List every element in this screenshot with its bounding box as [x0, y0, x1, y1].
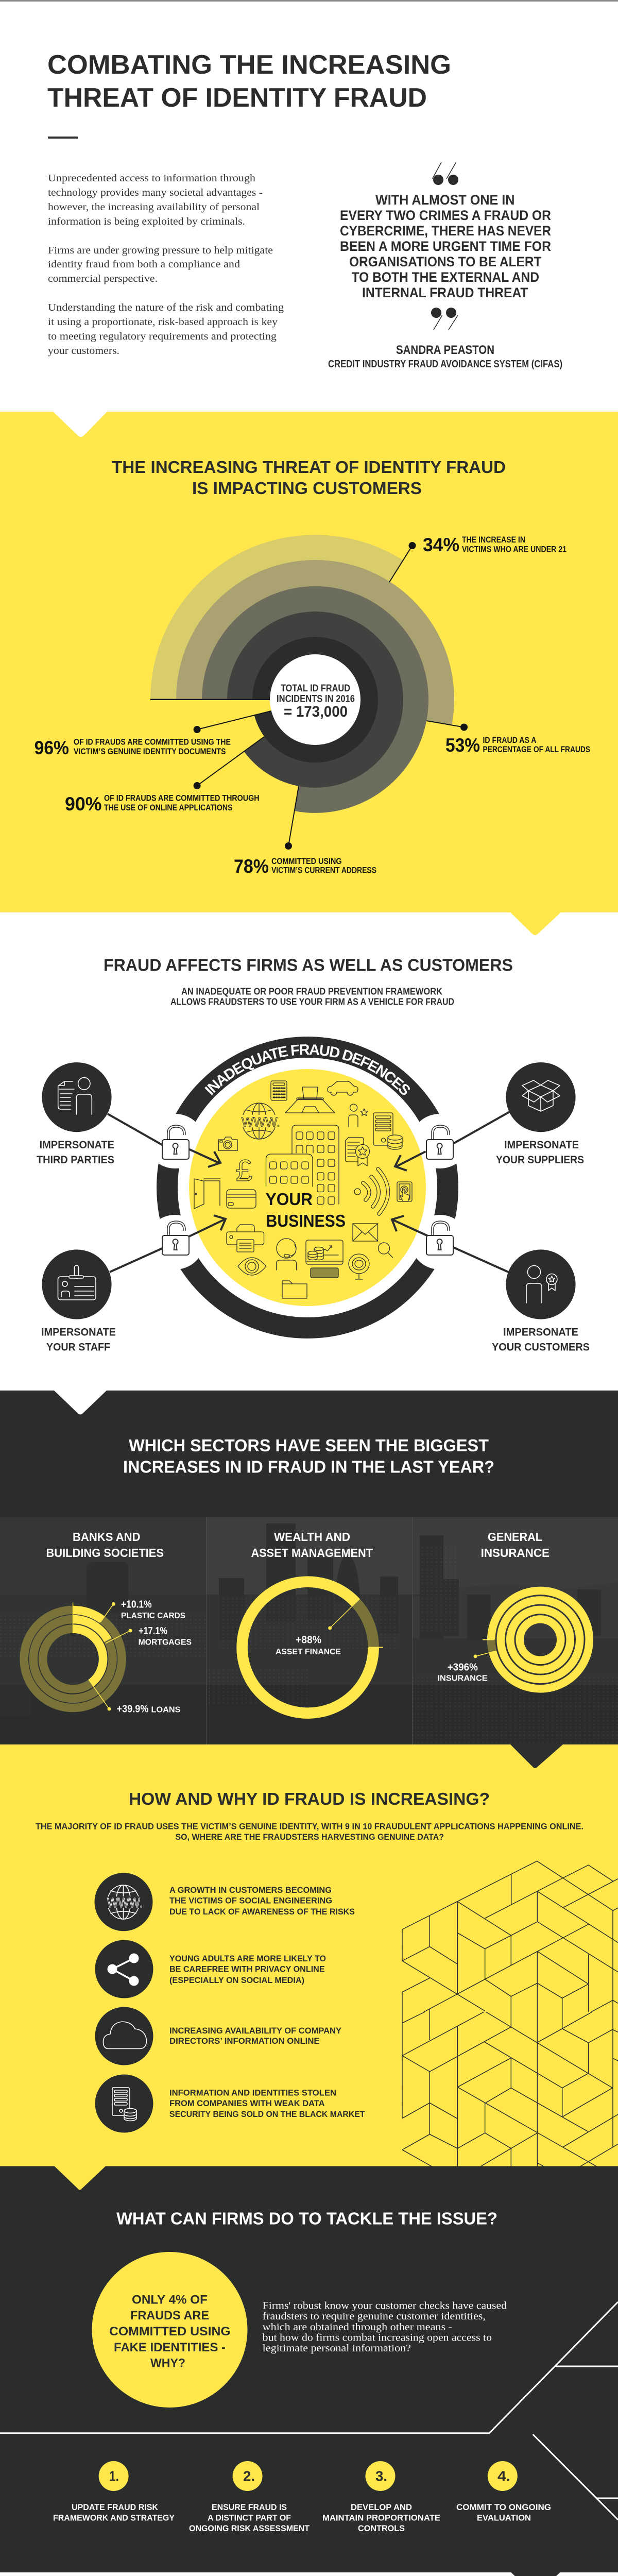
- intro text block: however, the increasing availability of personal: [48, 201, 260, 213]
- icon: closing quote mark: [431, 308, 458, 330]
- icon: padlock bottom right: [426, 1222, 453, 1255]
- panel: firms affected: [37, 912, 590, 1353]
- icon: document and person: [58, 1078, 92, 1114]
- callout: insurance: INSURANCE: [438, 1674, 488, 1683]
- icon: share: [107, 1954, 139, 1986]
- icon: server and database: [112, 2088, 136, 2121]
- icon: folder: [282, 1281, 307, 1298]
- label: [41, 1326, 116, 1353]
- item: young adults: [95, 1940, 326, 1998]
- intro text block: technology provides many societal advantages -: [48, 187, 263, 198]
- text: INCREASING AVAILABILITY OF COMPANY: [169, 2026, 342, 2036]
- callout: 90%: THE USE OF ONLINE APPLICATIONS: [104, 803, 233, 812]
- callout: asset finance: ASSET FINANCE: [276, 1648, 341, 1656]
- label: YOUR STAFF: [46, 1342, 110, 1353]
- heading: INCREASES IN ID FRAUD IN THE LAST YEAR?: [123, 1457, 494, 1477]
- subheading: AN INADEQUATE OR POOR FRAUD PREVENTION FRAMEWORK: [181, 987, 442, 997]
- pull quote: EVERY TWO CRIMES A FRAUD OR: [340, 208, 551, 223]
- callout: plastic cards: PLASTIC CARDS: [121, 1612, 185, 1620]
- callout: 96%: VICTIM’S GENUINE IDENTITY DOCUMENTS: [74, 747, 226, 756]
- attack path: suppliers: [395, 1062, 584, 1171]
- callout: mortgages: +17.1%: [139, 1625, 167, 1637]
- callout: loans: [89, 1680, 181, 1715]
- callout: loans: +39.9%: [116, 1704, 149, 1715]
- label: IMPERSONATE: [503, 1326, 578, 1338]
- step 3: [322, 2461, 440, 2533]
- text: THE VICTIMS OF SOCIAL ENGINEERING: [169, 1896, 332, 1906]
- step 1: 1.: [109, 2468, 119, 2484]
- subheading: ALLOWS FRAUDSTERS TO USE YOUR FIRM AS A VEHICLE FOR FRAUD: [170, 997, 454, 1007]
- notch arrow: [511, 2572, 560, 2576]
- step 2: 2.: [243, 2468, 255, 2484]
- item: black market: [95, 2074, 365, 2133]
- notch arrow: [54, 1391, 107, 1415]
- label: YOUR SUPPLIERS: [496, 1154, 584, 1166]
- step 4: COMMIT TO ONGOING: [456, 2502, 551, 2512]
- chart: banks rings: [24, 1603, 122, 1708]
- callout: 96%: 96%: [35, 737, 69, 758]
- centre total: INCIDENTS IN 2016: [277, 693, 355, 705]
- intro text block: identity fraud from both a compliance and: [48, 259, 240, 270]
- subheading: [170, 987, 454, 1007]
- skyline photo background: [0, 1517, 618, 1747]
- text: DUE TO LACK OF AWARENESS OF THE RISKS: [169, 1907, 355, 1917]
- icon: touch screen: [397, 1182, 412, 1201]
- callout: mortgages: MORTGAGES: [139, 1638, 192, 1647]
- panel: what firms can do: [0, 2166, 618, 2572]
- icon: camera: [218, 1137, 237, 1151]
- sector title: [46, 1530, 164, 1560]
- icon: globe: WWW.: [107, 1895, 143, 1910]
- heading: WHAT CAN FIRMS DO TO TACKLE THE ISSUE?: [116, 2209, 497, 2228]
- step 4: [456, 2461, 551, 2522]
- notch arrow: [53, 412, 107, 437]
- icon: car: [328, 1081, 358, 1095]
- callout: 34%: THE INCREASE IN: [462, 535, 525, 545]
- body text: legitimate personal information?: [263, 2343, 411, 2354]
- label: IMPERSONATE: [41, 1326, 116, 1338]
- body text: Firms' robust know your customer checks have caused: [263, 2300, 507, 2312]
- icon: eye: [238, 1258, 266, 1275]
- pull quote: [340, 192, 551, 300]
- callout circle: FRAUDS ARE: [130, 2309, 209, 2323]
- icon: desk lamp laptop: [285, 1087, 335, 1113]
- callout: mortgages: [106, 1625, 192, 1647]
- callout: 96%: OF ID FRAUDS ARE COMMITTED USING THE: [74, 738, 231, 747]
- icon: globe www: WWW.: [242, 1114, 280, 1130]
- business circle: [189, 1069, 426, 1306]
- icon: monitor with finance chart: [306, 1240, 343, 1278]
- icon: magnifier: [378, 1243, 392, 1258]
- heading: [123, 1436, 494, 1477]
- label: YOUR CUSTOMERS: [492, 1342, 590, 1353]
- ring label: INADEQUATE FRAUD DEFENCES: [204, 1044, 410, 1095]
- callout: asset finance: [276, 1599, 359, 1656]
- text: A GROWTH IN CUSTOMERS BECOMING: [169, 1885, 332, 1895]
- callout: 90%: 90%: [65, 793, 102, 815]
- sector title: INSURANCE: [481, 1546, 550, 1560]
- label: [37, 1139, 114, 1166]
- icon: printer: [227, 1225, 264, 1252]
- callout: 53%: 53%: [445, 735, 480, 756]
- text: [169, 2026, 342, 2046]
- intro text block: to meeting regulatory requirements and protecting: [48, 331, 277, 342]
- label: [492, 1326, 590, 1353]
- text: DIRECTORS’ INFORMATION ONLINE: [169, 2036, 320, 2046]
- step 3: 3.: [375, 2468, 387, 2484]
- icon: opening quote mark: [433, 162, 458, 185]
- step 3: CONTROLS: [358, 2523, 405, 2533]
- icon: globe www: [241, 1103, 281, 1139]
- notch arrow: [510, 912, 561, 935]
- heading: THE INCREASING THREAT OF IDENTITY FRAUD: [112, 457, 506, 477]
- step 2: ONGOING RISK ASSESSMENT: [189, 2523, 310, 2533]
- callout: asset finance: +88%: [296, 1635, 321, 1646]
- label: IMPERSONATE: [39, 1139, 114, 1151]
- title rule: [48, 137, 78, 139]
- callout circle: [92, 2252, 247, 2408]
- icon: padlock top right: [426, 1126, 453, 1159]
- callout: insurance: +396%: [448, 1662, 478, 1673]
- text: SECURITY BEING SOLD ON THE BLACK MARKET: [169, 2109, 365, 2119]
- panel: introduction: [47, 50, 562, 370]
- heading: IS IMPACTING CUSTOMERS: [192, 479, 422, 498]
- notch arrow: [510, 1744, 563, 1768]
- icon: customer with award: [526, 1265, 557, 1303]
- step 2: ENSURE FRAUD IS: [212, 2502, 287, 2512]
- icon: person with star: [349, 1104, 368, 1127]
- icon: credit card: [227, 1190, 256, 1208]
- icon: staff id badge: [58, 1265, 96, 1300]
- icon: webcam: [349, 1254, 369, 1279]
- heading: WHICH SECTORS HAVE SEEN THE BIGGEST: [129, 1436, 489, 1455]
- callout: 78%: VICTIM’S CURRENT ADDRESS: [271, 866, 376, 875]
- attack path: customers: [392, 1216, 590, 1353]
- panel: how and why: [0, 1744, 618, 2166]
- sector: wealth and asset management: [242, 1530, 383, 1713]
- icon: tall building: [292, 1125, 339, 1205]
- callout: plastic cards: [100, 1599, 185, 1622]
- subheading: [36, 1822, 583, 1842]
- text: [169, 2088, 365, 2119]
- callout circle: WHY?: [150, 2357, 185, 2370]
- callout circle: FAKE IDENTITIES -: [114, 2341, 226, 2354]
- centre total: [277, 683, 355, 720]
- text: INFORMATION AND IDENTITIES STOLEN: [169, 2088, 336, 2098]
- callout: 34%: 34%: [423, 534, 459, 555]
- text: (ESPECIALLY ON SOCIAL MEDIA): [169, 1975, 304, 1985]
- chart: radial fraud statistics: [150, 535, 454, 813]
- icon: server and database: [373, 1113, 402, 1149]
- callout: 53%: PERCENTAGE OF ALL FRAUDS: [483, 745, 590, 754]
- label: THIRD PARTIES: [37, 1154, 114, 1166]
- sector title: WEALTH AND: [274, 1530, 350, 1544]
- icon: padlock top left: [162, 1126, 189, 1159]
- step 1: [53, 2461, 175, 2522]
- step 1: FRAMEWORK AND STRATEGY: [53, 2513, 175, 2522]
- text: BE CAREFREE WITH PRIVACY ONLINE: [169, 1964, 325, 1974]
- business label: BUSINESS: [266, 1211, 346, 1230]
- text: [169, 1954, 326, 1985]
- sector title: BANKS AND: [73, 1530, 140, 1544]
- intro text block: Understanding the nature of the risk and combating: [48, 302, 284, 313]
- pull quote: CYBERCRIME, THERE HAS NEVER: [340, 223, 551, 239]
- callout: 96%: [35, 711, 271, 758]
- body text: [263, 2300, 507, 2354]
- intro text block: Unprecedented access to information through: [48, 173, 255, 184]
- sector title: [251, 1530, 373, 1560]
- callout: 34%: VICTIMS WHO ARE UNDER 21: [462, 545, 566, 554]
- sector title: ASSET MANAGEMENT: [251, 1546, 373, 1560]
- icon: front building: [266, 1154, 313, 1187]
- icon: pound sign: £: [236, 1154, 252, 1188]
- text: [169, 1885, 355, 1917]
- callout: 34%: [389, 534, 566, 582]
- business label: [266, 1190, 346, 1230]
- step 1: UPDATE FRAUD RISK: [72, 2502, 159, 2512]
- title: [47, 50, 451, 113]
- quote attribution: [328, 343, 562, 370]
- icon: wireless signal: [354, 1169, 388, 1214]
- icon: envelope: [353, 1224, 378, 1241]
- callout: 53%: ID FRAUD AS A: [483, 736, 537, 745]
- callout: 78%: COMMITTED USING: [271, 857, 342, 866]
- title: COMBATING THE INCREASING: [47, 50, 451, 80]
- callout: plastic cards: +10.1%: [121, 1599, 152, 1611]
- attack path: staff: [41, 1215, 226, 1353]
- sector title: BUILDING SOCIETIES: [46, 1546, 164, 1560]
- callout: 90%: OF ID FRAUDS ARE COMMITTED THROUGH: [104, 793, 260, 803]
- defences ring: [157, 1037, 458, 1338]
- body text: fraudsters to require genuine customer identities,: [263, 2311, 486, 2322]
- chart: wealth ring: [242, 1582, 383, 1713]
- intro text block: commercial perspective.: [48, 273, 158, 284]
- pull quote: WITH ALMOST ONE IN: [375, 192, 515, 208]
- callout: loans: LOANS: [151, 1706, 181, 1715]
- body text: but how do firms combat increasing open access to: [263, 2332, 492, 2343]
- subheading: SO, WHERE ARE THE FRAUDSTERS HARVESTING GENUINE DATA?: [175, 1832, 444, 1842]
- step 4: 4.: [497, 2468, 510, 2484]
- icon: door: [194, 1179, 220, 1209]
- icon: globe: [107, 1885, 144, 1919]
- intro text block: [48, 173, 284, 357]
- decorative white lines: [0, 2302, 618, 2520]
- callout: 78%: 78%: [234, 856, 269, 877]
- panel: sectors: [0, 1391, 618, 1747]
- label: IMPERSONATE: [504, 1139, 579, 1151]
- intro text block: it using a proportionate, risk-based approach is key: [48, 316, 278, 328]
- text: YOUNG ADULTS ARE MORE LIKELY TO: [169, 1954, 326, 1963]
- step 4: EVALUATION: [477, 2513, 531, 2522]
- callout: 53%: [426, 721, 590, 756]
- pull quote: BEEN A MORE URGENT TIME FOR: [340, 239, 551, 254]
- step 2: A DISTINCT PART OF: [208, 2513, 291, 2522]
- title: THREAT OF IDENTITY FRAUD: [47, 83, 427, 113]
- icon: headset operator: [277, 1239, 297, 1270]
- attack path: third parties: [37, 1062, 220, 1167]
- sector: general insurance: [438, 1530, 589, 1689]
- icon: cloud: [103, 2022, 147, 2048]
- item: company directors: [95, 2007, 342, 2065]
- geometric pattern: [402, 1861, 618, 2166]
- business label: YOUR: [266, 1190, 313, 1209]
- text: FROM COMPANIES WITH WEAK DATA: [169, 2098, 325, 2108]
- heading: FRAUD AFFECTS FIRMS AS WELL AS CUSTOMERS: [104, 955, 513, 975]
- centre total: TOTAL ID FRAUD: [281, 683, 350, 694]
- intro text block: information is being exploited by criminals.: [48, 216, 245, 227]
- step 3: MAINTAIN PROPORTIONATE: [322, 2513, 440, 2522]
- quote attribution: CREDIT INDUSTRY FRAUD AVOIDANCE SYSTEM (CIFAS): [328, 359, 562, 370]
- callout circle: COMMITTED USING: [109, 2325, 231, 2338]
- centre total: = 173,000: [284, 703, 348, 720]
- intro text block: Firms are under growing pressure to help mitigate: [48, 245, 273, 256]
- panel: further reading: [114, 2572, 560, 2576]
- callout: insurance: [438, 1651, 496, 1683]
- callout: 78%: [234, 786, 376, 877]
- sector: banks and building societies: [24, 1530, 192, 1715]
- icon: open box: [522, 1080, 560, 1111]
- notch arrow: [55, 2166, 106, 2190]
- heading: HOW AND WHY ID FRAUD IS INCREASING?: [129, 1789, 490, 1808]
- pull quote: TO BOTH THE EXTERNAL AND: [352, 269, 539, 285]
- body text: which are obtained through other means -: [263, 2321, 452, 2333]
- pull quote: ORGANISATIONS TO BE ALERT: [349, 254, 542, 269]
- label: [496, 1139, 584, 1166]
- pull quote: INTERNAL FRAUD THREAT: [362, 285, 528, 300]
- item: social engineering: [95, 1873, 355, 1931]
- quote attribution: SANDRA PEASTON: [396, 343, 494, 357]
- callout circle: ONLY 4% OF: [132, 2293, 208, 2307]
- chart: insurance rings: [483, 1590, 589, 1689]
- sector title: [481, 1530, 550, 1560]
- icon: certificate: [345, 1138, 370, 1166]
- subheading: THE MAJORITY OF ID FRAUD USES THE VICTIM’S GENUINE IDENTITY, WITH 9 IN 10 FRAUDULENT APPLICATIONS HAPPENING ONLINE.: [36, 1822, 583, 1832]
- icon: padlock bottom left: [162, 1222, 189, 1255]
- callout: 90%: [65, 737, 264, 815]
- intro text block: your customers.: [48, 345, 119, 357]
- panel: customers impact: [0, 412, 618, 912]
- sector title: GENERAL: [488, 1530, 542, 1544]
- heading: [112, 457, 506, 498]
- step 3: DEVELOP AND: [351, 2502, 412, 2512]
- icon: calculator: [271, 1081, 287, 1100]
- step 2: [189, 2461, 310, 2533]
